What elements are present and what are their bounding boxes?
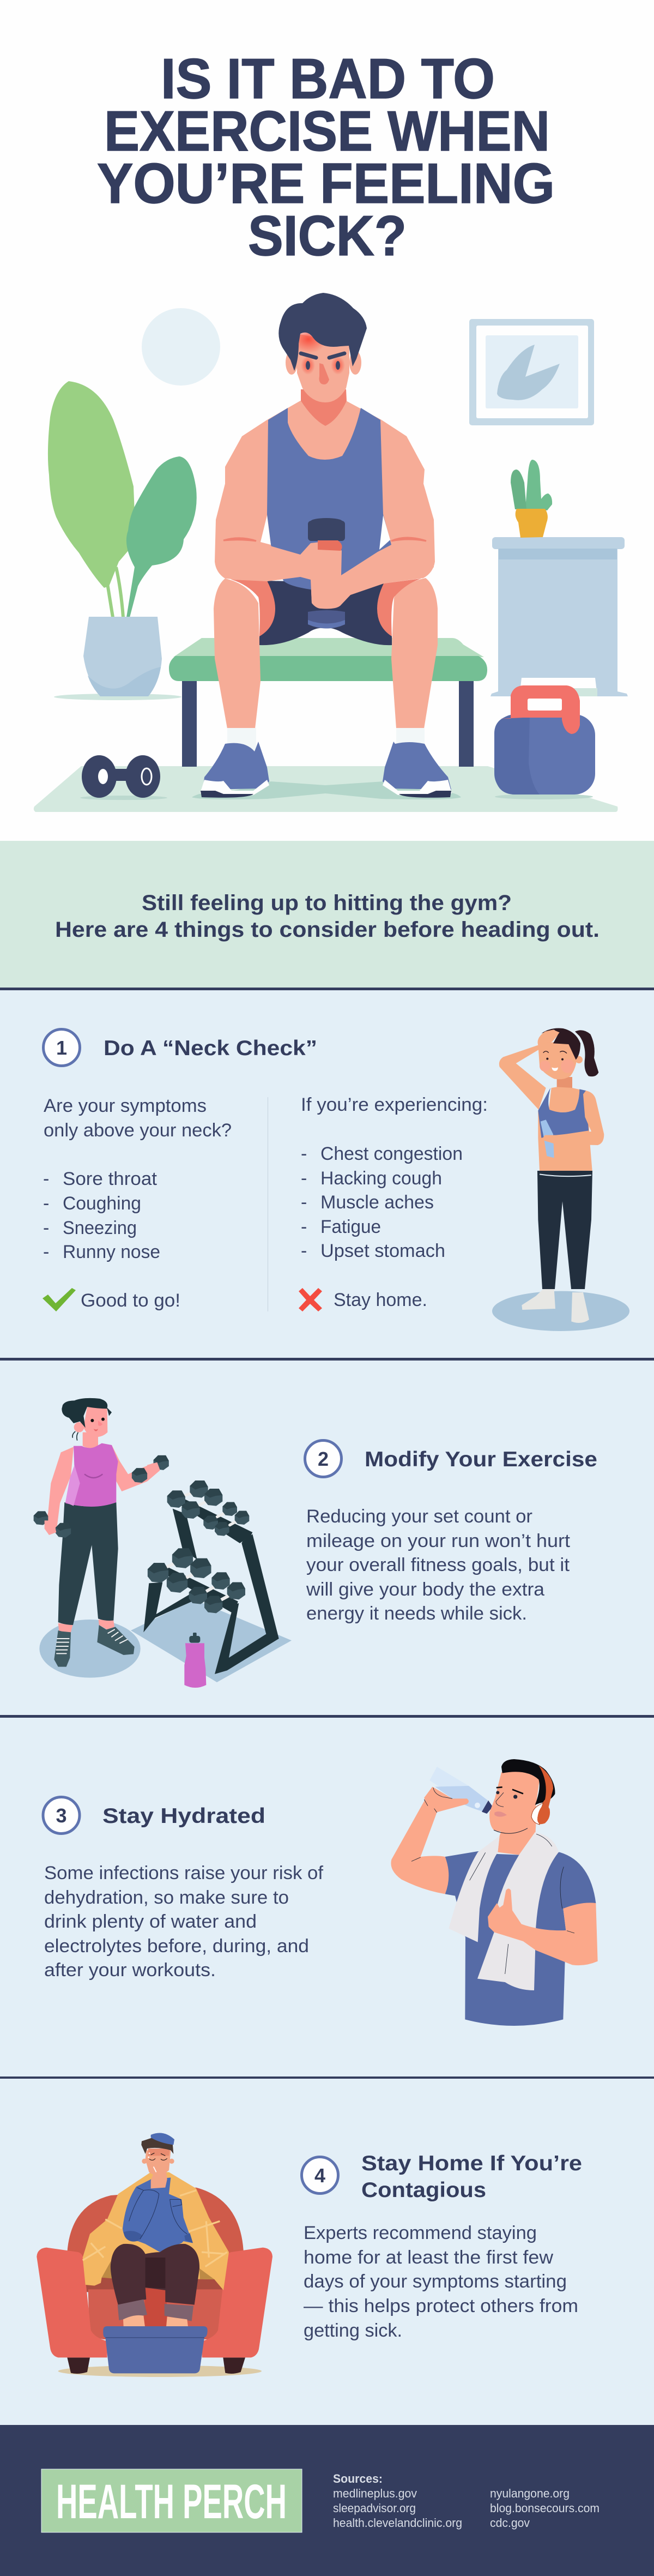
left column text: - <box>43 1169 49 1189</box>
rack frame <box>173 1509 197 1560</box>
tank top <box>267 408 391 589</box>
panel: stay hydrated <box>0 1715 654 2077</box>
heading: Stay Home If You’re <box>361 2152 582 2175</box>
body text <box>306 1506 571 1624</box>
woman <box>58 1620 114 1632</box>
bottom rack dumbbells <box>167 1561 233 1599</box>
right column text: Upset stomach <box>320 1241 445 1261</box>
body text: Experts recommend staying <box>304 2223 537 2243</box>
sources: sleepadvisor.org <box>333 2501 416 2515</box>
body text: electrolytes before, during, and <box>44 1936 309 1957</box>
bottle <box>184 1643 206 1688</box>
right column text: - <box>301 1192 307 1213</box>
body text: will give your body the extra <box>306 1579 544 1600</box>
right column text: - <box>301 1241 307 1261</box>
heading <box>361 2152 582 2202</box>
intro band: Still feeling up to hitting the gym? <box>142 891 512 915</box>
heading: Contagious <box>361 2178 486 2202</box>
body text: home for at least the first few <box>304 2247 553 2268</box>
illustration: man drinking water <box>391 1759 598 2026</box>
stay home: Stay home. <box>334 1290 427 1310</box>
socks <box>227 728 425 753</box>
left column text: Sore throat <box>63 1169 158 1189</box>
body text: getting sick. <box>304 2320 402 2341</box>
icon: cross <box>299 1288 322 1311</box>
left column text: Runny nose <box>63 1242 160 1262</box>
hand dumbbells <box>153 1455 169 1470</box>
title: EXERCISE WHEN <box>104 100 550 163</box>
right column text: - <box>301 1217 307 1237</box>
right column text: - <box>301 1143 307 1164</box>
title <box>97 47 555 268</box>
right column text: Muscle aches <box>320 1192 434 1213</box>
wall circle <box>142 308 220 386</box>
body text: mileage on your run won’t hurt <box>306 1531 571 1551</box>
torso and arms <box>215 401 435 609</box>
panel: modify your exercise <box>0 1358 654 1715</box>
left column text: Sneezing <box>63 1218 137 1238</box>
panel: stay home if contagious <box>0 2077 654 2425</box>
sources: nyulangone.org <box>490 2487 570 2500</box>
picture frame <box>469 319 594 425</box>
body text: energy it needs while sick. <box>306 1603 527 1624</box>
number badge 4: 4 <box>314 2164 325 2187</box>
number badge 4 <box>302 2157 338 2193</box>
body text: drink plenty of water and <box>44 1911 257 1932</box>
sources: medlineplus.gov <box>333 2487 417 2500</box>
top rack dumbbells <box>184 1491 241 1525</box>
icon: check <box>43 1288 76 1311</box>
body text: your overall fitness goals, but it <box>306 1555 570 1575</box>
potted plant <box>48 381 197 700</box>
intro band: Here are 4 things to consider before heading out. <box>55 918 600 942</box>
good to go: Good to go! <box>81 1290 180 1311</box>
shorts <box>259 581 392 645</box>
body text <box>304 2223 578 2341</box>
footer <box>0 2425 654 2576</box>
left column text: Are your symptoms <box>44 1096 207 1116</box>
illustration: woman with hand on forehead <box>492 1028 629 1331</box>
bench <box>169 638 487 767</box>
number badge 2: 2 <box>318 1448 329 1470</box>
sources <box>333 2472 600 2530</box>
floor mat <box>34 766 618 812</box>
heading: Do A “Neck Check” <box>104 1037 317 1060</box>
right column text: If you’re experiencing: <box>301 1094 488 1115</box>
face and hair <box>278 293 367 426</box>
cabinet <box>491 537 628 696</box>
number badge 3 <box>43 1797 80 1833</box>
number badge 1 <box>44 1030 80 1066</box>
number badge 2 <box>305 1441 341 1477</box>
body text: Reducing your set count or <box>306 1506 532 1527</box>
body text: after your workouts. <box>44 1960 216 1981</box>
left column text: - <box>43 1218 49 1238</box>
body text <box>44 1863 324 1981</box>
heading: Modify Your Exercise <box>365 1448 597 1471</box>
right column text <box>301 1094 488 1261</box>
forearms <box>218 539 434 609</box>
sources: cdc.gov <box>490 2516 530 2530</box>
number badge 3: 3 <box>56 1804 67 1827</box>
body text: dehydration, so make sure to <box>44 1887 289 1908</box>
left column text <box>43 1096 232 1262</box>
kettlebell <box>494 685 595 799</box>
legs <box>214 578 438 729</box>
illustration: sick man in armchair <box>37 2133 272 2377</box>
left column text: - <box>43 1193 49 1214</box>
sources: blog.bonsecours.com <box>490 2501 600 2515</box>
logo: HEALTH PERCH <box>56 2474 287 2529</box>
right column text: Chest congestion <box>320 1143 463 1164</box>
number badge 1: 1 <box>56 1037 67 1059</box>
body text: Some infections raise your risk of <box>44 1863 324 1883</box>
body text: — this helps protect others from <box>304 2296 578 2316</box>
title: IS IT BAD TO <box>161 47 495 111</box>
title: SICK? <box>248 204 407 268</box>
sources: health.clevelandclinic.org <box>333 2516 462 2530</box>
floor dumbbell <box>80 755 167 800</box>
heading: Stay Hydrated <box>102 1804 265 1828</box>
body text: days of your symptoms starting <box>304 2271 567 2292</box>
cactus <box>511 460 552 538</box>
shoes <box>200 742 452 798</box>
title: YOU’RE FEELING <box>97 152 555 215</box>
illustration: woman with dumbbells and rack <box>34 1398 292 1688</box>
right column text: Hacking cough <box>320 1168 442 1189</box>
panel: neck check <box>0 988 654 1358</box>
intro band <box>0 841 654 988</box>
logo <box>41 2469 302 2532</box>
right column text: - <box>301 1168 307 1189</box>
left column text: only above your neck? <box>44 1120 232 1141</box>
left column text: - <box>43 1242 49 1262</box>
held dumbbell <box>308 518 345 628</box>
right column text: Fatigue <box>320 1217 381 1237</box>
left column text: Coughing <box>63 1193 141 1214</box>
sources: Sources: <box>333 2472 383 2485</box>
floor shadow <box>192 781 461 799</box>
hero illustration: man on bench <box>34 293 628 812</box>
